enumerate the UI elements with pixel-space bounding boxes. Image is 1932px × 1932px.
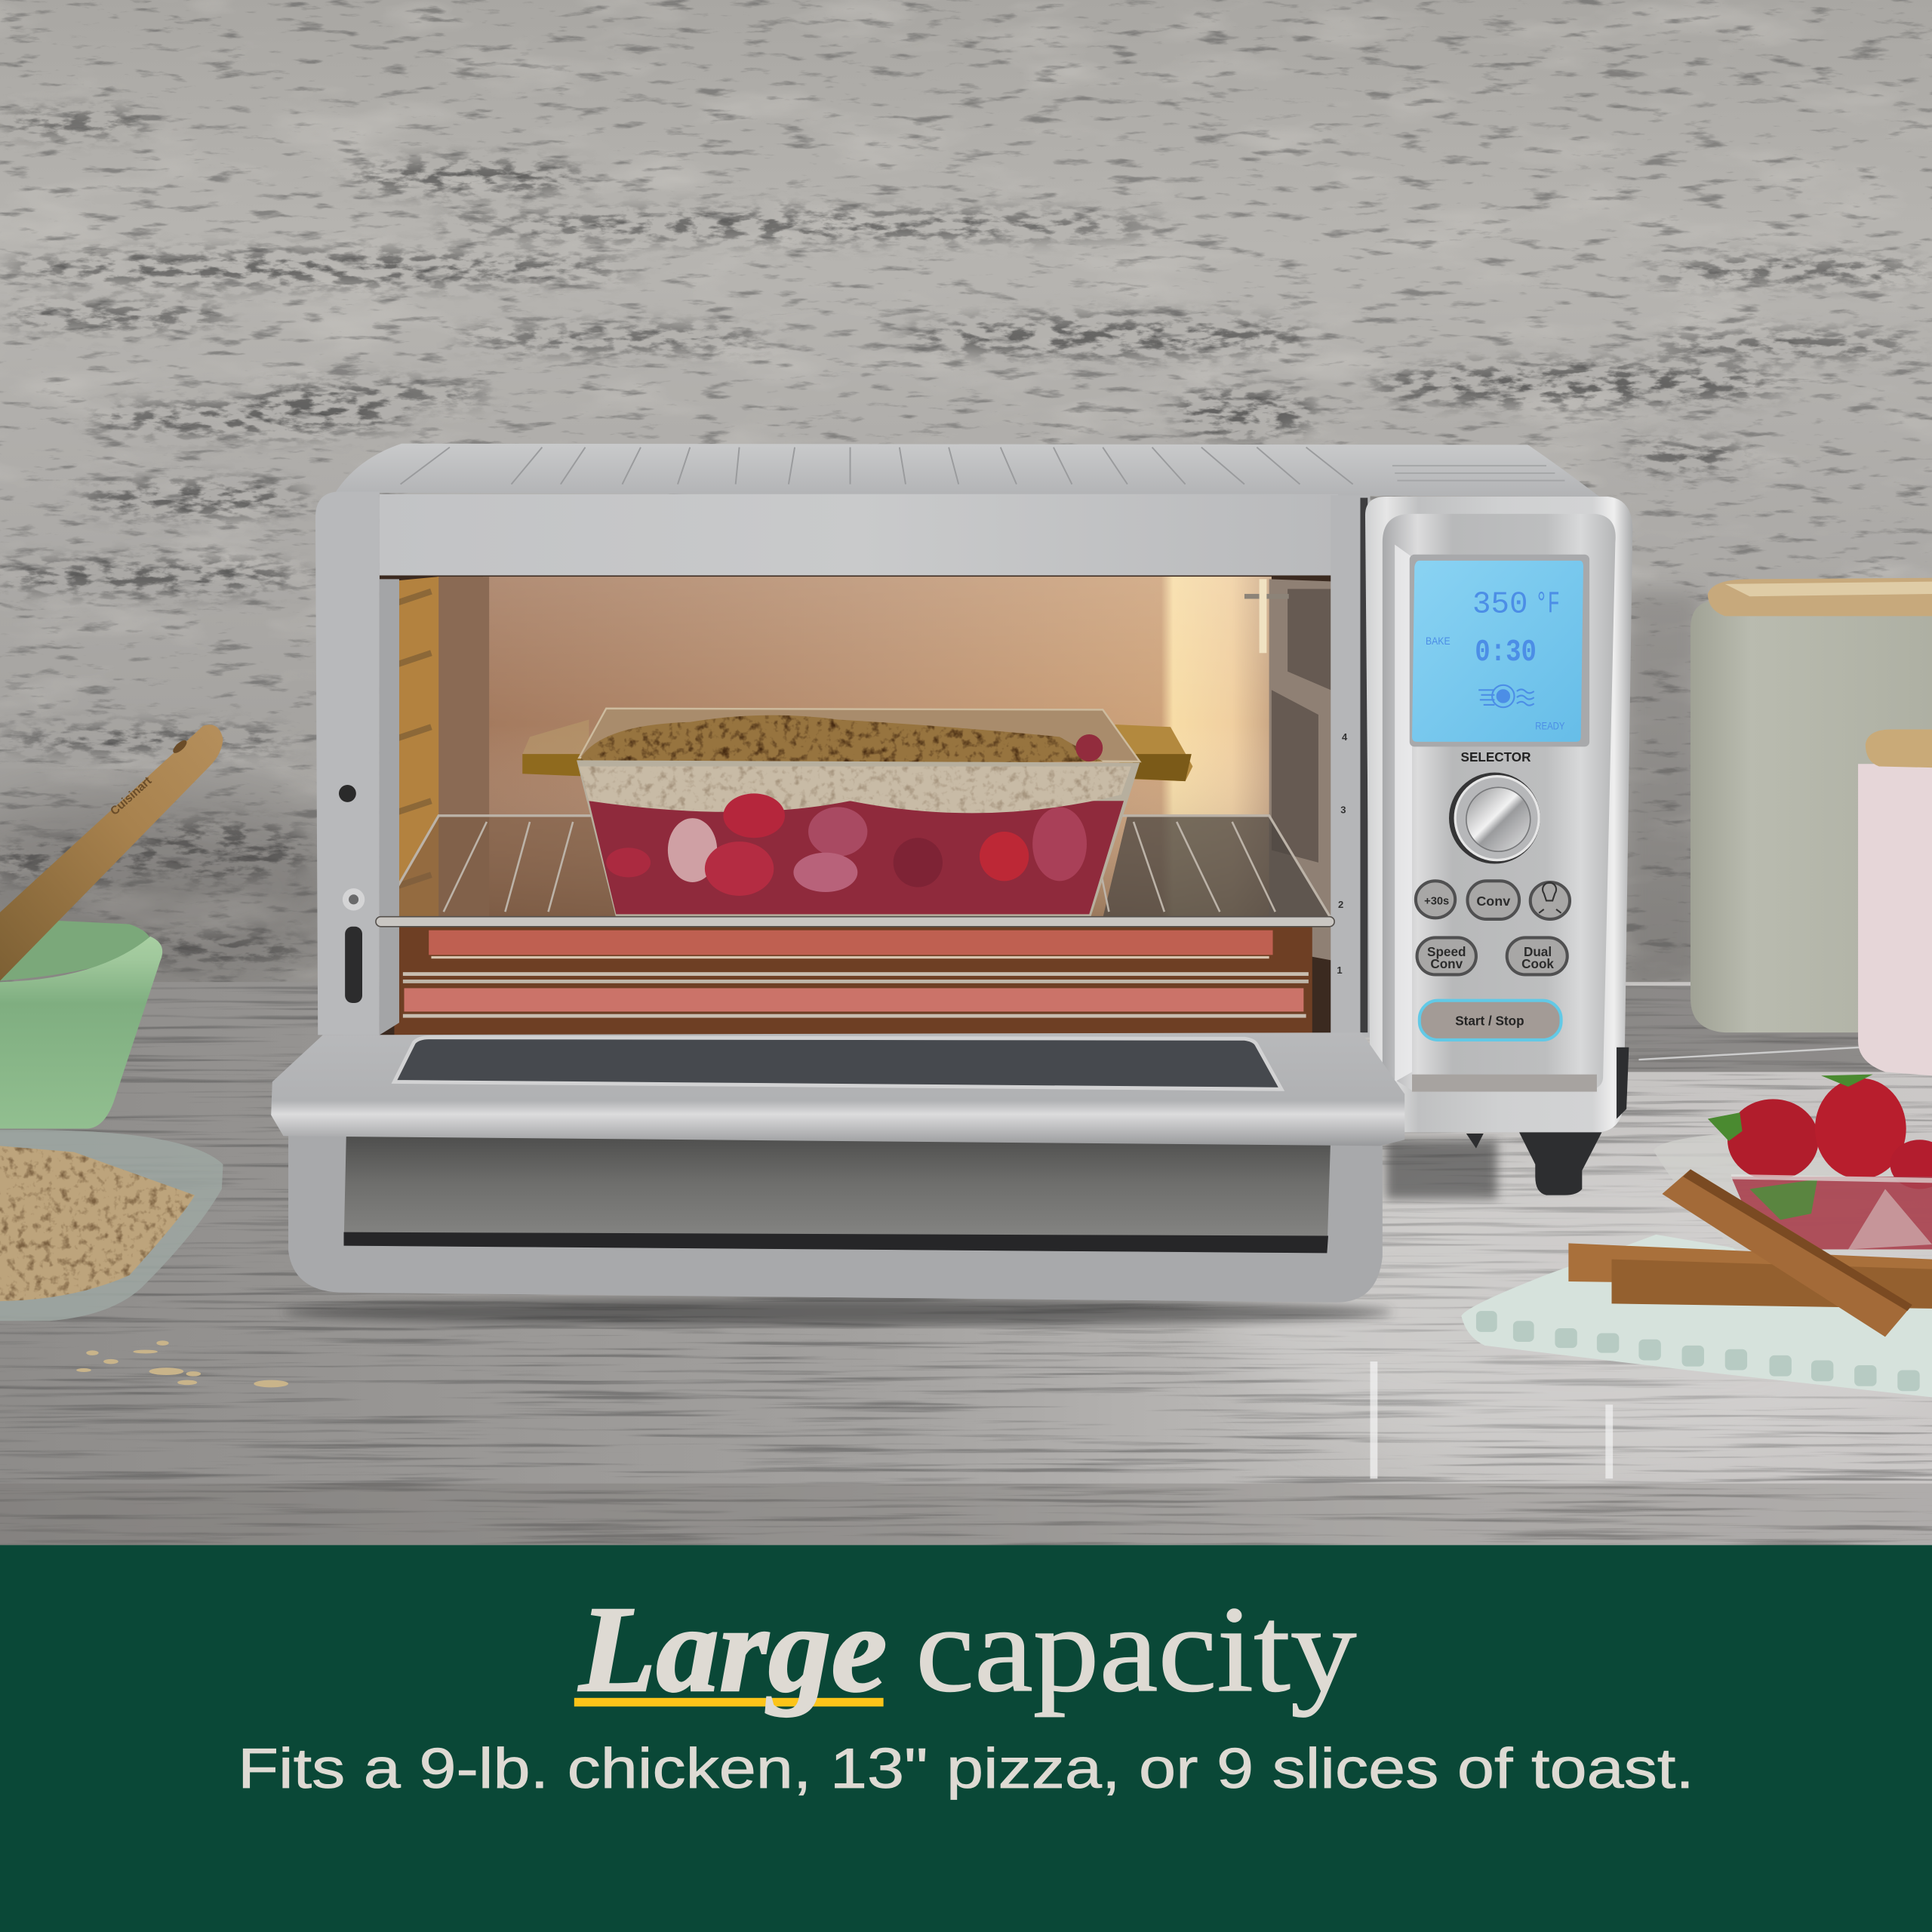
title underline [574,1698,884,1706]
canister: pink storage jar [1858,730,1932,1075]
leaves [1708,1075,1873,1141]
wire rack [380,816,1331,918]
control buttons: Cook [1521,956,1554,971]
LCD display: READY [1535,720,1564,732]
strawberry [1727,1099,1819,1180]
oven interior [380,574,1340,1036]
front rack bar [376,917,1334,927]
title: Large [577,1582,888,1718]
control buttons [1416,881,1570,974]
LCD display: °F [1535,587,1560,622]
dish handles [522,719,1192,781]
oven feet [1466,1048,1629,1195]
selector label: SELECTOR [1461,749,1531,764]
heating elements [403,931,1309,1018]
caption: Fits a 9-lb. chicken, 13" pizza, or 9 slices of toast. [238,1737,1694,1800]
strawberry [1815,1078,1906,1179]
panel: marble countertop [0,982,1932,1549]
oven top with vents [335,444,1599,497]
control buttons: Dual [1524,944,1552,959]
left door frame [315,491,399,1035]
panel: marble wall background [0,0,1932,992]
folded green towel [1461,1235,1932,1397]
scattered oats [76,1340,288,1387]
lower berries through glass [1731,1177,1932,1250]
icon: oven light [1539,883,1561,913]
towel waffle squares [1476,1311,1920,1391]
dish body with fruit [577,760,1140,918]
LCD display: BAKE [1426,635,1451,647]
dish back rim [579,709,1140,761]
open door top surface [271,1032,1404,1146]
title second word: capacity [915,1582,1357,1718]
oven [271,444,1632,1303]
icon: fan and airflow [1478,685,1534,707]
control buttons: Speed [1427,944,1466,959]
control buttons: Conv [1476,894,1510,909]
wooden spoon [0,724,223,981]
start / stop button: Start / Stop [1455,1013,1524,1028]
right pillar with rack numbers: 4 [1342,731,1348,743]
strawberries in glass bowl [1654,1075,1932,1252]
lower door frame with glass [288,1134,1383,1303]
green bowl interior [0,918,150,981]
glass baking dish with strawberry crumble [522,709,1192,918]
LCD display: 0:30 [1475,635,1537,670]
right pillar with rack numbers: 1 [1337,964,1343,976]
cinnamon sticks [1568,1169,1932,1337]
strawberry [1890,1140,1932,1189]
right pillar with rack numbers [1331,495,1371,1038]
glass bowl of oats [0,1130,223,1321]
LCD display: 350 [1472,587,1527,622]
control buttons: Conv [1430,956,1463,971]
green mixing bowl [0,937,162,1129]
selector knob [1449,773,1540,863]
right pillar with rack numbers: 3 [1340,804,1346,816]
wooden spoon: Cuisinart [108,774,154,818]
panel: green caption band [0,1545,1932,1932]
lintel [380,494,1338,575]
canister: sage storage jar [1690,578,1932,1032]
crumble top [579,715,1103,767]
control panel [1365,497,1632,1132]
right pillar with rack numbers: 2 [1338,899,1343,910]
LCD display [1410,555,1589,746]
control buttons: +30s [1424,895,1449,907]
start / stop button [1420,1001,1561,1040]
